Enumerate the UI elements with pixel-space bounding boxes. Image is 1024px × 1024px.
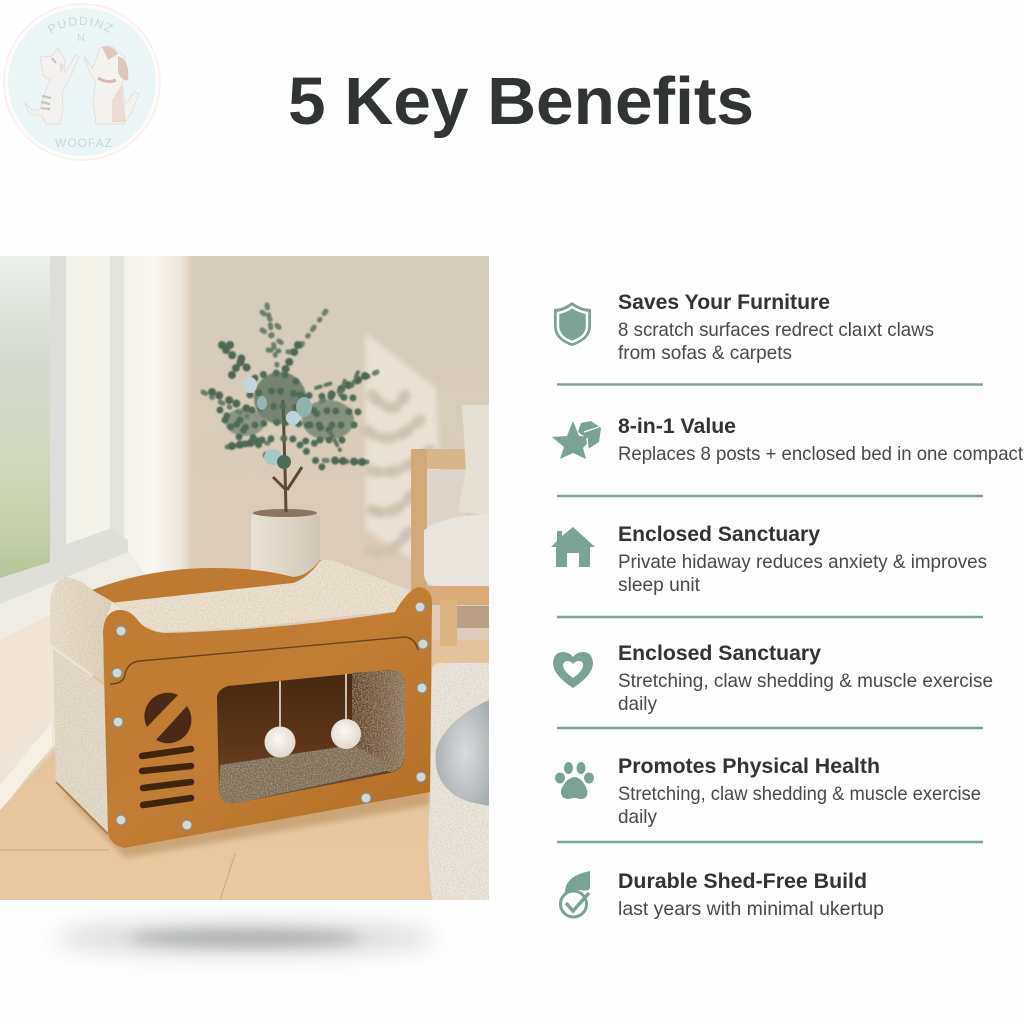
text block: last years with minimal ukertup [618, 898, 884, 920]
text block: Stretching, claw shedding & muscle exercise [618, 783, 981, 805]
top scratch surface [110, 560, 409, 632]
logo text: WOOFAZ [55, 136, 113, 150]
floor seam [0, 850, 235, 900]
icon: paw [555, 762, 594, 799]
text block [618, 290, 934, 364]
cat scratcher house [50, 560, 432, 848]
grey cushion [436, 700, 489, 806]
icon: leaf and check [560, 871, 590, 917]
text block: 8 scratch surfaces redrect claıxt claws [618, 319, 934, 341]
title: 5 Key Benefits [288, 64, 754, 139]
box floor shadow [64, 792, 430, 860]
logo dog [84, 45, 139, 124]
benefit: durable shed-free build [560, 869, 884, 920]
product photo panel [0, 256, 489, 900]
opening [217, 670, 405, 803]
window sill and lower wall [0, 528, 150, 812]
potted plant [203, 305, 377, 576]
wall leaf shadows [366, 395, 430, 552]
hanging balls [264, 674, 361, 758]
logo text: N [77, 33, 85, 44]
text block [618, 754, 981, 828]
text block [618, 414, 1024, 465]
floor [0, 640, 489, 900]
pot [251, 511, 320, 576]
vent circle [144, 693, 191, 743]
text block: 8-in-1 Value [618, 414, 736, 438]
text block [618, 869, 884, 920]
benefit: saves your furniture [554, 290, 934, 364]
logo badge [4, 4, 160, 160]
text block: Enclosed Sanctuary [618, 522, 820, 546]
text block: Enclosed Sanctuary [618, 641, 821, 665]
text block: Promotes Physical Health [618, 754, 880, 778]
inner scratch wall [352, 670, 405, 772]
text block: Stretching, claw shedding & muscle exercise [618, 670, 993, 692]
text block [618, 641, 993, 715]
chair [411, 405, 489, 646]
icon: heart [553, 652, 593, 688]
vent slats [142, 749, 191, 805]
text block: daily [618, 806, 657, 828]
benefit: 8-in-1 value [552, 414, 1024, 465]
text block [618, 522, 987, 596]
screws [112, 602, 428, 830]
text block: daily [618, 693, 657, 715]
text block: from sofas & carpets [618, 342, 792, 364]
floating shadow [55, 924, 435, 952]
logo text [48, 16, 114, 150]
benefit: promotes physical health [555, 754, 981, 828]
text block: Saves Your Furniture [618, 290, 830, 314]
text block: Durable Shed-Free Build [618, 869, 867, 893]
room background [0, 256, 489, 800]
icon: shield [554, 302, 591, 346]
text block: sleep unit [618, 574, 701, 596]
logo text: PUDDINZ [48, 16, 114, 34]
lid line [110, 637, 418, 684]
front wood panel [103, 587, 432, 848]
left side scratch panel [50, 577, 112, 682]
text block: Private hidaway reduces anxiety & improves [618, 551, 987, 573]
benefit: enclosed sanctuary second [553, 641, 993, 715]
foliage [203, 305, 377, 470]
rug [428, 663, 489, 900]
benefit: enclosed sanctuary [551, 522, 987, 596]
back panel [92, 560, 322, 602]
logo cat [25, 48, 79, 124]
icon: house [551, 527, 595, 567]
trunk [273, 400, 302, 512]
icon: star and box [552, 421, 601, 459]
